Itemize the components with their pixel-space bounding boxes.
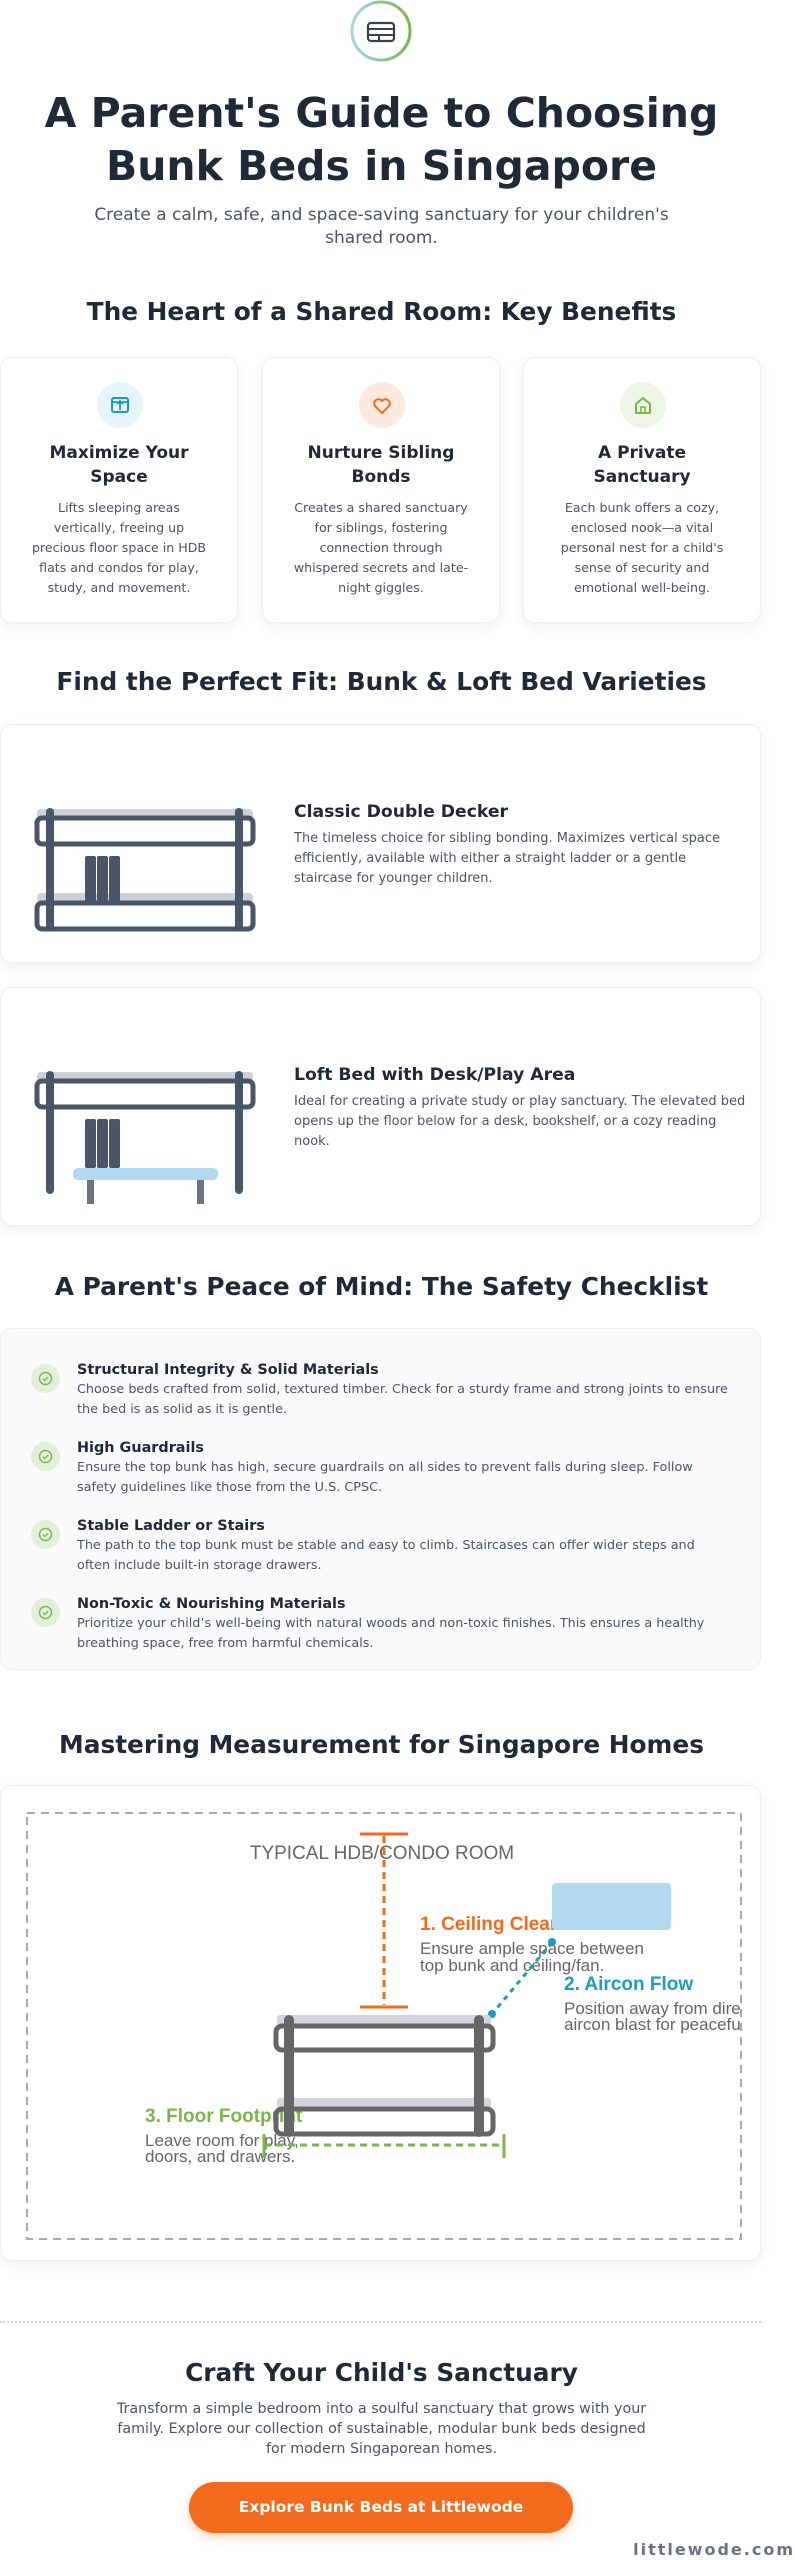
icon: expand space: [97, 382, 143, 428]
icon: check: [31, 1442, 60, 1471]
checklist item 4: breathing space, free from harmful chemicals.: [77, 1636, 374, 1651]
callout: floor footprint: 3. Floor Footprint: [145, 2106, 303, 2127]
card text: emotional well-being.: [574, 580, 710, 595]
variety text: nook.: [294, 1134, 330, 1149]
panel: benefit maximize space: [0, 357, 238, 623]
card text: study, and movement.: [48, 580, 190, 595]
card text: connection through: [320, 540, 442, 555]
callout: floor footprint: Leave room for play,: [145, 2131, 299, 2150]
icon: heart: [359, 382, 405, 428]
title: [44, 89, 718, 190]
variety text: The timeless choice for sibling bonding. Maximizes vertical space: [294, 831, 720, 846]
card title: Bonds: [351, 466, 411, 486]
card title: A Private: [598, 443, 686, 463]
checklist item 4: [31, 1596, 704, 1651]
card text: [294, 500, 468, 595]
card text: night giggles.: [338, 580, 424, 595]
panel: benefit private sanctuary: [523, 357, 761, 623]
checklist item 1: [31, 1362, 728, 1417]
card text: sense of security and: [575, 560, 709, 575]
card text: Creates a shared sanctuary: [294, 500, 468, 515]
card title: Space: [90, 466, 148, 486]
heading: measurement: Mastering Measurement for Singapore Homes: [59, 1730, 704, 1759]
panel: safety checklist: [0, 1328, 761, 1670]
card text: [561, 500, 723, 595]
card text: Each bunk offers a cozy,: [565, 500, 719, 515]
icon: header bed logo: [350, 0, 412, 62]
checklist item 2: [31, 1440, 693, 1495]
checklist item 1: Structural Integrity & Solid Materials: [77, 1362, 379, 1378]
variety text: staircase for younger children.: [294, 871, 493, 886]
variety text: [294, 1094, 745, 1149]
panel: measurement diagram: [0, 1785, 761, 2261]
callout: ceiling clearance: [420, 1914, 644, 1975]
icon: double decker bed: [34, 808, 256, 932]
callout: ceiling clearance: Ensure ample space between: [420, 1939, 644, 1958]
checklist item 2: safety guidelines like those from the U.S. CPSC.: [77, 1480, 382, 1495]
checklist item 3: The path to the top bunk must be stable and easy to climb. Staircases can offer wider steps and: [77, 1538, 695, 1553]
arrow: floor measure: [264, 2134, 504, 2158]
heading: key benefits: The Heart of a Shared Room: Key Benefits: [87, 297, 676, 326]
variety text: [294, 831, 720, 886]
callout: floor footprint: doors, and drawers.: [145, 2147, 295, 2166]
card text: [32, 500, 206, 595]
callout: floor footprint: [145, 2106, 303, 2166]
title: Bunk Beds in Singapore: [106, 142, 657, 190]
variety text: Ideal for creating a private study or play sanctuary. The elevated bed: [294, 1094, 745, 1109]
heading: call to action: Craft Your Child's Sanctuary: [185, 2358, 578, 2387]
checklist item 3: often include built-in storage drawers.: [77, 1558, 322, 1573]
card title: [593, 443, 691, 486]
subtitle: shared room.: [325, 228, 438, 248]
room label: TYPICAL HDB/CONDO ROOM: [250, 1843, 514, 1864]
arrow: aircon flow: [488, 1938, 556, 2018]
card title: [308, 443, 454, 486]
panel: benefit sibling bonds: [262, 357, 500, 623]
icon: loft bed with desk: [34, 1071, 256, 1204]
icon: bunk bed: [276, 2015, 493, 2134]
icon: check: [31, 1520, 60, 1549]
variety title: Classic Double Decker: [294, 802, 508, 822]
checklist item 2: High Guardrails: [77, 1440, 204, 1456]
variety title: Loft Bed with Desk/Play Area: [294, 1065, 575, 1085]
callout: aircon flow: 2. Aircon Flow: [564, 1974, 693, 1995]
card text: personal nest for a child's: [561, 540, 723, 555]
CTA button: [189, 2482, 573, 2533]
card text: flats and condos for play,: [39, 560, 199, 575]
card title: Sanctuary: [593, 466, 691, 486]
CTA text: family. Explore our collection of sustainable, modular bunk beds designed: [117, 2421, 646, 2437]
CTA text: [116, 2401, 646, 2457]
card text: whispered secrets and late-: [294, 560, 468, 575]
checklist item 4: Non-Toxic & Nourishing Materials: [77, 1596, 346, 1612]
heading: safety checklist: A Parent's Peace of Mind: The Safety Checklist: [55, 1272, 708, 1301]
card text: vertically, freeing up: [54, 520, 184, 535]
variety text: opens up the floor below for a desk, bookshelf, or a cozy reading: [294, 1114, 716, 1129]
checklist item 1: the bed is as solid as it is gentle.: [77, 1402, 287, 1417]
card title: Nurture Sibling: [308, 443, 454, 463]
panel: loft bed: [0, 987, 761, 1226]
card title: [50, 443, 188, 486]
CTA button: Explore Bunk Beds at Littlewode: [239, 2498, 523, 2516]
callout: aircon flow: Position away from direct: [564, 1999, 754, 2018]
variety text: efficiently, available with either a straight ladder or a gentle: [294, 851, 686, 866]
icon: house: [620, 382, 666, 428]
heading: varieties: Find the Perfect Fit: Bunk & Loft Bed Varieties: [56, 667, 707, 696]
checklist item 1: Choose beds crafted from solid, textured timber. Check for a sturdy frame and strong joints to ensure: [77, 1382, 728, 1397]
subtitle: [94, 205, 669, 248]
card text: enclosed nook—a vital: [571, 520, 713, 535]
arrow: ceiling measure: [360, 1834, 408, 2007]
card text: for siblings, fostering: [315, 520, 447, 535]
CTA text: for modern Singaporean homes.: [266, 2441, 497, 2457]
callout: ceiling clearance: 1. Ceiling Clearance: [420, 1914, 601, 1935]
subtitle: Create a calm, safe, and space-saving sanctuary for your children's: [94, 205, 669, 225]
card title: Maximize Your: [50, 443, 188, 463]
checklist item 3: Stable Ladder or Stairs: [77, 1518, 265, 1534]
icon: check: [31, 1598, 60, 1627]
panel: classic double decker: [0, 724, 761, 963]
footer brand: littlewode.com: [633, 2540, 795, 2559]
card text: precious floor space in HDB: [32, 540, 206, 555]
icon: check: [31, 1364, 60, 1393]
checklist item 4: Prioritize your child’s well-being with natural woods and non-toxic finishes. This ensures a healthy: [77, 1616, 704, 1631]
icon: aircon unit: [552, 1883, 671, 1930]
card text: Lifts sleeping areas: [58, 500, 180, 515]
checklist item 3: [31, 1518, 695, 1573]
callout: aircon flow: [564, 1976, 740, 2034]
title: A Parent's Guide to Choosing: [45, 89, 718, 137]
CTA text: Transform a simple bedroom into a soulful sanctuary that grows with your: [117, 2401, 646, 2417]
checklist item 2: Ensure the top bunk has high, secure guardrails on all sides to prevent falls during sleep. Follow: [77, 1460, 693, 1475]
callout: ceiling clearance: top bunk and ceiling/fan.: [420, 1956, 604, 1975]
